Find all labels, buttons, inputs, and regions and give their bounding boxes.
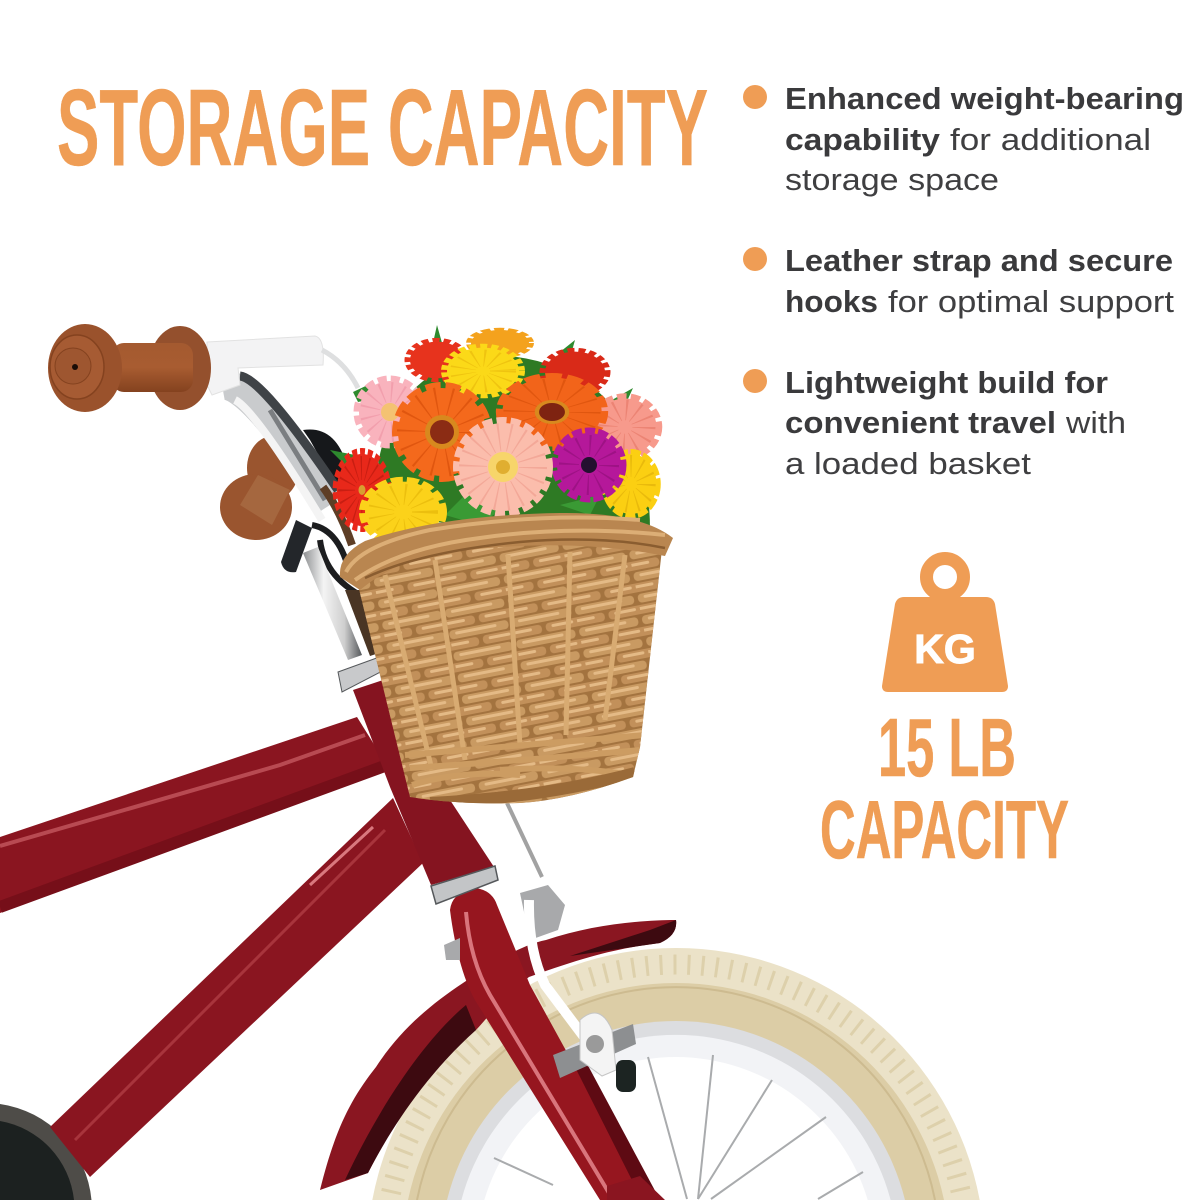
flower: small orange top [469,329,531,357]
top tube [0,717,390,913]
basket base band [405,735,645,785]
bullet: leather strap: Leather strap and secure [785,243,1173,278]
flower: purple [555,431,623,499]
flower: yellow right [604,452,658,516]
fender [320,920,676,1190]
bullet: weight-bearing: storage space [785,162,999,197]
flower: yellow lower left [363,480,443,544]
icon: KG weight [882,558,1008,692]
bullet: lightweight build: with [1065,405,1126,440]
basket rim [340,513,673,590]
down tube [50,798,423,1177]
stem [303,547,388,692]
flower: red top right [543,350,607,394]
flower: red lower left [335,452,389,528]
bell [303,430,342,482]
bullet: lightweight build [743,365,1126,481]
capacity label [820,701,1069,876]
spokes [494,1055,863,1199]
bullet: lightweight build: Lightweight build for [785,365,1108,400]
wicker basket [340,513,680,820]
flower: salmon right [591,397,659,457]
bullet: weight-bearing [743,81,1184,197]
bullet: weight-bearing: Enhanced weight-bearing [785,81,1184,116]
fork collar [431,866,498,904]
flower: pink centre [457,421,549,513]
bullet: lightweight build: convenient travel [785,405,1056,440]
feature list [743,81,1184,481]
brake assembly [444,803,636,1092]
illustration: bicycle [0,324,980,1200]
bullet: leather strap: for optimal support [888,284,1174,319]
brake lever and cables [207,336,370,600]
bullet: leather strap [743,243,1174,319]
bullet: lightweight build: a loaded basket [785,446,1031,481]
flower: orange left [396,386,488,478]
icon: KG weight: KG [914,626,976,672]
foliage [330,325,650,530]
title: STORAGE CAPACITY [57,67,708,189]
flower: yellow top [445,346,521,396]
head tube [353,677,494,885]
flower bouquet [330,325,659,544]
training wheel [0,1104,92,1200]
bullet: weight-bearing: for additional [950,122,1151,157]
capacity label: 15 LB [878,701,1016,794]
flower: light pink left [357,379,423,445]
near grip [48,324,211,412]
front wheel [372,948,980,1200]
far grip [220,436,299,540]
bullet: leather strap: hooks [785,284,878,319]
bullet: weight-bearing: capability [785,122,941,157]
flower: orange right [500,376,604,448]
flower: red top left [408,340,466,380]
basket body [358,537,663,803]
fork [450,888,665,1200]
handlebar [222,376,338,520]
